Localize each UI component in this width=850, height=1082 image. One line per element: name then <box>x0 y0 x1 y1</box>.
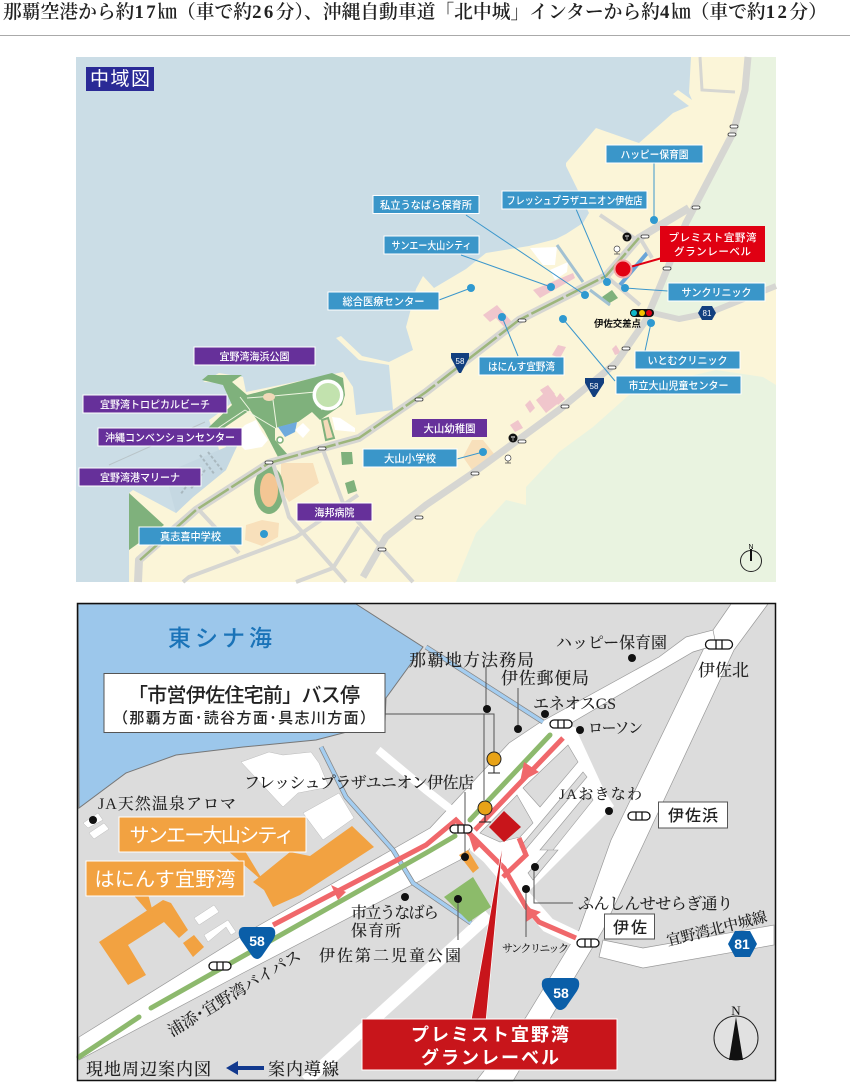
pin icons <box>505 246 620 463</box>
label: itomu clinic: いとむクリニック <box>648 355 728 367</box>
callout: bus stop: （那覇方面･読谷方面･具志川方面） <box>113 710 375 727</box>
green triangle bay <box>129 493 164 550</box>
callout lines <box>385 667 573 940</box>
leader lines <box>439 163 668 459</box>
place names: サンクリニック <box>502 942 569 955</box>
label: mashiki junior high <box>139 527 242 545</box>
pink buildings <box>483 273 621 432</box>
callout: san-a <box>119 817 306 880</box>
post office icons: 〒 <box>510 436 516 443</box>
panel: detailed map <box>78 604 776 1081</box>
label: marina: 宜野湾港マリーナ <box>100 471 180 484</box>
label: sun clinic <box>668 283 765 301</box>
road median <box>140 238 639 560</box>
callout: san-a: サンエー大山シティ <box>130 824 294 847</box>
roads <box>138 208 689 582</box>
white buildings <box>83 752 354 942</box>
route shield 58 south <box>542 978 579 1010</box>
canals <box>321 647 543 923</box>
route shield 58 west: 58 <box>249 933 265 949</box>
box: isa <box>604 914 654 939</box>
label: fresh plaza <box>502 191 647 209</box>
park paths <box>218 392 322 430</box>
place names: 伊佐郵便局 <box>501 669 589 688</box>
town blocks <box>480 745 593 880</box>
icon: north compass: N <box>748 544 754 551</box>
road median <box>79 735 550 1057</box>
building: haninsu <box>99 900 204 985</box>
label: happy nursery <box>606 145 703 163</box>
callout: bus stop: 「市営伊佐住宅前」バス停 <box>128 684 360 707</box>
park <box>202 373 345 457</box>
legend: guide route <box>226 1059 339 1079</box>
place names: 伊佐第二児童公園 <box>319 947 461 965</box>
label: kaiho hospital <box>297 503 372 521</box>
place names: ローソン <box>588 721 643 737</box>
box: isa: 伊佐 <box>613 919 647 937</box>
park <box>444 877 491 922</box>
heading: east china sea: 東シナ海 <box>168 625 272 651</box>
location dots <box>260 216 658 538</box>
callout: bus stop <box>104 674 385 732</box>
label: sun clinic: サンクリニック <box>682 287 752 299</box>
label: itomu clinic <box>635 351 740 369</box>
route shield 58 second: 58 <box>590 382 599 391</box>
label: convention center: 沖縄コンベンションセンター <box>105 431 235 444</box>
map title: 現地周辺案内図 <box>86 1060 211 1079</box>
canals <box>557 245 610 305</box>
place names: エネオスGS <box>533 695 616 713</box>
callout: haninsu <box>86 861 244 918</box>
label: fresh plaza: フレッシュプラザユニオン伊佐店 <box>506 194 643 207</box>
place names: ふんしんせせらぎ通り <box>578 895 733 913</box>
pool <box>278 422 297 437</box>
route shield 58 south: 58 <box>553 985 569 1001</box>
label: tropical beach: 宜野湾トロピカルビーチ <box>100 398 210 411</box>
label: oyama kindergarten <box>412 419 487 437</box>
stadium <box>312 380 344 410</box>
headline: access times: 那覇空港から約17㎞（車で約26分）、沖縄自動車道「北中城」インターから約4㎞（車で約12分） <box>3 1 827 23</box>
road name: kitanakagusuku line: 宜野湾北中城線 <box>665 907 769 950</box>
icon: north arrow <box>714 1003 758 1060</box>
place names: 保育所 <box>351 921 401 940</box>
label: seaside park <box>194 347 315 365</box>
callout: property name: プレミスト宜野湾 <box>411 1025 569 1045</box>
site marker <box>614 260 632 278</box>
post office icons: 〒 <box>624 235 630 242</box>
place names: ハッピー保育園 <box>556 633 667 652</box>
white harbor blocks <box>530 247 568 280</box>
label: children's center <box>616 376 741 394</box>
signals <box>209 640 733 970</box>
building: san-a <box>253 826 374 907</box>
icon: north arrow: N <box>731 1003 741 1018</box>
label: property: グランレーベル <box>674 245 752 258</box>
side roads <box>306 750 590 1081</box>
label: unabara nursery: 私立うなばら保育所 <box>380 198 472 212</box>
callout: property name <box>362 1019 617 1070</box>
label: mashiki junior high: 真志喜中学校 <box>160 530 221 543</box>
land <box>129 57 776 582</box>
label: kaiho hospital: 海邦病院 <box>314 506 355 519</box>
label: property <box>660 226 765 262</box>
label: convention center <box>98 428 242 446</box>
property block <box>489 811 521 842</box>
property pointer <box>471 842 503 1021</box>
hill terrain <box>456 370 776 582</box>
label: haninsu: はにんす宜野湾 <box>488 360 555 373</box>
route arrows <box>331 762 541 922</box>
panel: area map <box>76 57 776 582</box>
main roads <box>79 604 774 1081</box>
intersection label: 伊佐交差点 <box>594 318 641 330</box>
route shield 58 second <box>585 378 604 397</box>
route shield 81 <box>728 931 757 957</box>
label: marina <box>79 468 201 486</box>
label: seaside park: 宜野湾海浜公園 <box>220 350 290 363</box>
label: oyama elementary <box>363 449 457 467</box>
guide route <box>273 738 576 938</box>
route shield 81 <box>698 306 716 320</box>
place names: フレッシュプラザユニオン伊佐店 <box>244 774 474 792</box>
site marker line <box>623 258 662 269</box>
label: oyama kindergarten: 大山幼稚園 <box>424 422 476 435</box>
panel title: 中域図 <box>90 68 150 90</box>
road name: bypass: 浦添･宜野湾バイパス <box>165 947 304 1040</box>
track <box>254 466 284 514</box>
route shield 81: 81 <box>703 309 712 318</box>
label: children's center: 市立大山児童センター <box>628 379 728 392</box>
place names <box>98 633 749 965</box>
callout: property name: グランレーベル <box>421 1047 559 1068</box>
label: san-a: サンエー大山シティ <box>392 239 472 252</box>
bus stop icon south <box>478 801 492 822</box>
place names: JAおきなわ <box>559 786 642 803</box>
place names: 伊佐北 <box>698 661 749 680</box>
post office icons <box>508 232 632 443</box>
green squares <box>341 290 618 494</box>
box: isahama: 伊佐浜 <box>668 807 718 825</box>
place names: 市立うなばら <box>351 904 439 922</box>
route shield 81: 81 <box>734 936 750 952</box>
label: happy nursery: ハッピー保育園 <box>620 148 688 161</box>
school grounds <box>245 440 495 546</box>
route shield 58 <box>451 353 469 373</box>
black dots <box>89 654 636 903</box>
place names: JA天然温泉アロマ <box>98 795 236 813</box>
label: medical center: 総合医療センター <box>342 295 424 308</box>
box: isahama <box>658 802 728 828</box>
place names: 那覇地方法務局 <box>409 651 534 670</box>
orange facility <box>459 850 479 873</box>
label: unabara nursery <box>373 196 479 214</box>
town street area <box>470 725 614 895</box>
beige hall <box>322 418 334 440</box>
label: san-a <box>384 236 479 254</box>
callout: haninsu: はにんす宜野湾 <box>94 868 236 891</box>
sea <box>78 604 423 808</box>
white halls <box>238 417 355 450</box>
marina water <box>165 425 240 513</box>
icon: north compass <box>740 544 762 572</box>
label: oyama elementary: 大山小学校 <box>384 452 436 465</box>
route shield 58: 58 <box>456 357 465 366</box>
route shield 58 west <box>239 927 275 959</box>
label: haninsu <box>479 357 564 375</box>
traffic light <box>630 309 654 317</box>
label: medical center <box>328 292 439 310</box>
legend: guide route: 案内導線 <box>268 1059 339 1079</box>
label: property: プレミスト宜野湾 <box>668 231 757 244</box>
label: tropical beach <box>83 395 227 413</box>
bus stop icon north <box>487 752 501 773</box>
signals <box>265 125 738 551</box>
